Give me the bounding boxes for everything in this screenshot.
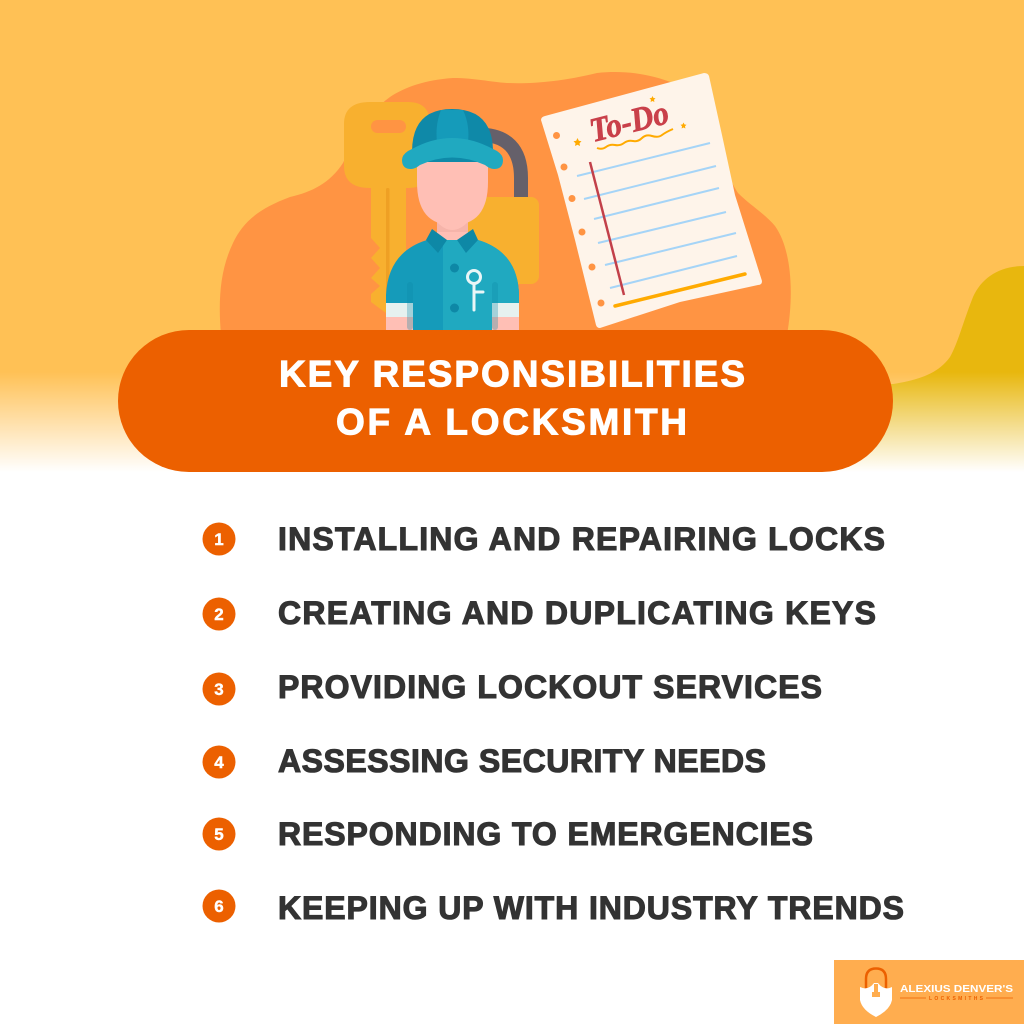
key badge [468,270,483,310]
illustration: locksmith [386,109,519,330]
list item 6: 6 [214,897,224,916]
illustration: key [344,102,430,322]
title pill [118,330,893,472]
list item 2: 2 [214,605,224,624]
list item 3: 3 [214,680,224,699]
margin line [590,162,624,295]
cap [412,109,493,162]
list item 3: PROVIDING LOCKOUT SERVICES [278,669,822,705]
background: yellow header [0,0,1024,472]
illustration: to-do paper [541,73,762,328]
list item 4: ASSESSING SECURITY NEEDS [278,743,766,779]
list item 5: RESPONDING TO EMERGENCIES [278,816,813,852]
list item 2: CREATING AND DUPLICATING KEYS [278,595,876,631]
list item 4: 4 [214,753,224,772]
face [417,150,488,225]
bottom highlight [615,274,745,306]
title text: KEY RESPONSIBILITIES [279,354,745,394]
paper holes [553,132,604,306]
background blob: dark yellow [800,266,1024,472]
list item 1: INSTALLING AND REPAIRING LOCKS [278,521,885,557]
background blob: orange [220,72,791,335]
illustration: padlock [450,134,539,284]
sleeve bands [386,303,413,317]
logo badge: LOCKSMITHS [929,996,984,1002]
stars [574,96,686,146]
ruled lines [577,143,737,288]
buttons [450,264,459,272]
to-do heading: To-Do [586,95,673,150]
logo icon: padlock [860,968,892,1017]
background fade to white [0,372,1024,472]
collar [426,229,478,253]
neck [437,215,468,245]
title pill: OF A LOCKSMITH [336,402,687,442]
list item 6: KEEPING UP WITH INDUSTRY TRENDS [278,890,904,926]
list item 1: 1 [214,530,224,549]
logo badge [834,960,1024,1024]
list item 5: 5 [214,825,224,844]
shirt [386,240,519,330]
squiggle underline [597,129,673,149]
logo text: ALEXIUS DENVER'S [900,984,1013,995]
